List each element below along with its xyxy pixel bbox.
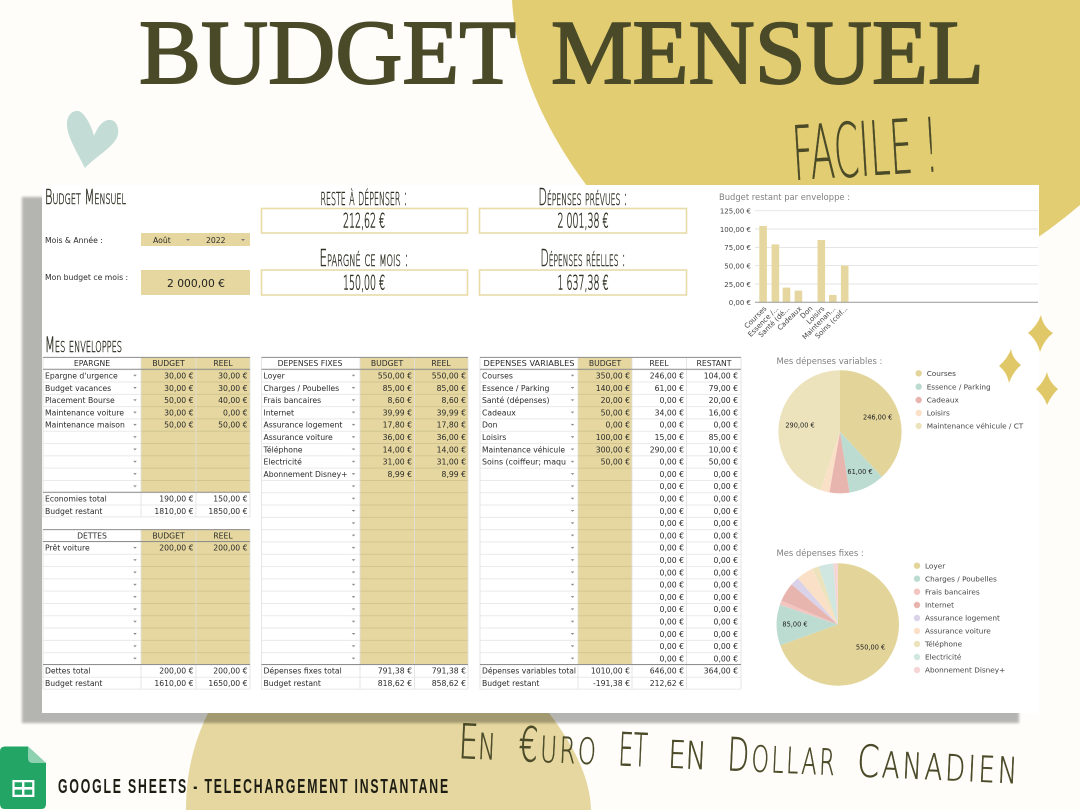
monthly budget [45, 270, 250, 295]
table: depenses variables: 0,00 € [660, 581, 684, 590]
table: epargne: Budget restant [45, 507, 102, 516]
table: depenses fixes: 8,99 € [388, 470, 412, 479]
table: depenses variables: 100,00 € [596, 433, 630, 442]
table: epargne: 40,00 € [218, 396, 248, 405]
legend: depenses variables: Essence / Parking [927, 382, 991, 391]
table: epargne: Placement Bourse [45, 396, 115, 405]
table: depenses variables: Dépenses variables total [482, 667, 576, 676]
table: depenses fixes: REEL [431, 359, 451, 368]
legend: depenses fixes: Abonnement Disney+ [925, 666, 1005, 675]
kpi: epargne ce mois [262, 246, 468, 295]
table: depenses variables: 0,00 € [660, 605, 684, 614]
bar chart: budget restant par enveloppe: Essence /... [747, 305, 780, 339]
table: depenses variables: 0,00 € [606, 421, 630, 430]
month and year selector: 2022 [206, 236, 226, 245]
legend: depenses fixes: Assurance logement [925, 614, 1000, 623]
table: epargne: BUDGET [152, 359, 185, 368]
table: depenses variables: 0,00 € [714, 593, 738, 602]
pie chart: depenses variables [776, 356, 902, 493]
kpi: reste a depenser: 212,62 € [343, 210, 385, 232]
footer text: en euro et en dollar canadien: EN [667, 733, 707, 778]
bar chart: budget restant par enveloppe: Maintenan... [801, 305, 837, 341]
kpi: epargne ce mois: Epargné ce mois : [320, 246, 408, 272]
table: epargne: 50,00 € [164, 396, 194, 405]
table: depenses fixes: 818,62 € [378, 679, 412, 688]
table: depenses variables: 85,00 € [709, 433, 738, 442]
table: depenses fixes: 791,38 € [432, 667, 466, 676]
table: depenses fixes: 550,00 € [378, 372, 412, 380]
table: depenses variables: Cadeaux [482, 408, 516, 417]
table: depenses variables: 0,00 € [714, 482, 738, 491]
footer text: en euro et en dollar canadien: CANADIEN [856, 736, 1021, 794]
kpi: depenses reelles: 1 637,38 € [558, 272, 608, 294]
bar chart: budget restant par enveloppe: 0,00 € [729, 299, 751, 307]
table: depenses variables: 0,00 € [660, 593, 684, 602]
table: depenses variables: 50,00 € [601, 408, 630, 417]
table: depenses variables: 0,00 € [714, 568, 738, 577]
section heading: mes enveloppes: Mes enveloppes [45, 333, 122, 357]
table: depenses variables: 50,00 € [601, 458, 630, 467]
table: depenses variables: 0,00 € [660, 470, 684, 479]
table: depenses variables: 646,00 € [650, 667, 684, 676]
table: depenses fixes: 8,60 € [442, 396, 466, 405]
table: depenses fixes: 14,00 € [437, 445, 466, 454]
footer text: en euro et en dollar canadien [457, 714, 1021, 795]
table: depenses variables: 0,00 € [660, 568, 684, 577]
legend: depenses fixes: Charges / Poubelles [925, 574, 997, 583]
table: depenses fixes: 17,80 € [383, 421, 412, 430]
table: depenses variables: 0,00 € [660, 630, 684, 639]
background blob: bottom [186, 690, 591, 810]
table: depenses variables: 0,00 € [714, 605, 738, 614]
legend: depenses fixes [914, 561, 1005, 675]
table: dettes: Dettes total [45, 667, 90, 676]
table: depenses variables: 0,00 € [714, 556, 738, 565]
table: depenses fixes: Téléphone [262, 445, 303, 454]
table: depenses fixes: 8,99 € [442, 470, 466, 479]
table: depenses fixes [262, 357, 468, 689]
bar chart: budget restant par enveloppe: 75,00 € [724, 244, 751, 252]
table: depenses variables: Santé (dépenses) [482, 396, 549, 405]
pie chart: depenses fixes: Mes dépenses fixes : [776, 548, 864, 558]
table: depenses variables: 0,00 € [714, 618, 738, 626]
pie chart: depenses fixes: 85,00 € [782, 620, 808, 628]
table: depenses variables: 0,00 € [660, 544, 684, 553]
legend: depenses fixes: Loyer [925, 561, 945, 570]
table: depenses variables: RESTANT [697, 359, 732, 368]
bar chart: budget restant par enveloppe: 50,00 € [724, 262, 751, 270]
table: depenses fixes: 858,62 € [432, 679, 466, 688]
table: epargne: 50,00 € [218, 421, 248, 430]
table: depenses variables: 0,00 € [714, 630, 738, 639]
table: dettes: 200,00 € [159, 544, 194, 553]
table: depenses variables [480, 357, 741, 689]
table: depenses variables: 0,00 € [714, 654, 738, 663]
table: depenses variables: 0,00 € [660, 458, 684, 467]
table: dettes: 200,00 € [213, 544, 248, 553]
kpi: reste a depenser: reste à dépenser : [320, 182, 408, 211]
bar chart: budget restant par enveloppe: Santé (dé... [757, 305, 791, 339]
table: depenses variables: 104,00 € [704, 372, 738, 380]
table: dettes: 1650,00 € [208, 679, 248, 688]
month and year selector: Août [153, 236, 171, 245]
table: depenses fixes: Assurance logement [264, 421, 342, 430]
legend: depenses variables: Courses [927, 369, 956, 378]
table: epargne: Budget vacances [45, 384, 111, 393]
table: depenses variables: 0,00 € [660, 556, 684, 565]
table: depenses variables: 0,00 € [660, 421, 684, 430]
table: depenses fixes: 8,60 € [388, 396, 412, 405]
table: depenses variables: 0,00 € [660, 654, 684, 663]
table: depenses variables: 290,00 € [650, 445, 684, 454]
table: depenses variables: 0,00 € [660, 618, 684, 626]
legend: depenses variables: Cadeaux [927, 396, 959, 405]
table: depenses variables: 246,00 € [650, 372, 684, 380]
table: depenses variables: REEL [649, 359, 669, 368]
month and year selector: Mois & Année : [45, 236, 103, 245]
table: depenses variables: 0,00 € [660, 519, 684, 528]
table: epargne: 50,00 € [164, 421, 194, 430]
bar chart: budget restant par enveloppe [719, 192, 1038, 341]
table: epargne: 150,00 € [213, 494, 248, 504]
table: dettes: DETTES [77, 531, 107, 540]
footer text: en euro et en dollar canadien: DOLLAR [726, 727, 839, 786]
table: depenses variables: 0,00 € [714, 421, 738, 430]
legend: depenses fixes: Frais bancaires [925, 587, 980, 596]
table: depenses variables: 15,00 € [655, 433, 684, 442]
table: depenses variables: 0,00 € [714, 519, 738, 528]
table: depenses variables: 0,00 € [660, 396, 684, 405]
table: epargne [43, 357, 250, 517]
table: depenses fixes: 550,00 € [432, 372, 466, 380]
month and year selector [45, 233, 250, 246]
legend: depenses variables: Maintenance véhicule / CT [927, 422, 1024, 431]
footer text: en euro et en dollar canadien: €URO [517, 717, 600, 776]
table: depenses fixes: Budget restant [264, 679, 321, 688]
legend: depenses variables: Loisirs [927, 409, 950, 418]
table: depenses fixes: BUDGET [371, 359, 403, 368]
kpi: depenses reelles: Dépenses réelles : [540, 246, 626, 272]
table: epargne: 30,00 € [164, 372, 194, 380]
table: depenses variables: 0,00 € [714, 642, 738, 651]
kpi: reste a depenser [262, 182, 468, 233]
table: depenses variables: 0,00 € [714, 507, 738, 516]
table: depenses variables: 140,00 € [596, 384, 630, 393]
monthly budget: Mon budget ce mois : [45, 273, 128, 282]
table: depenses variables: 212,62 € [650, 679, 684, 688]
table: epargne: Epargne d'urgence [45, 372, 118, 380]
kpi: depenses prevues: 2 001,38 € [558, 210, 608, 232]
table: epargne: 30,00 € [164, 408, 194, 417]
legend: depenses fixes: Electricité [925, 653, 962, 662]
table: dettes: 1610,00 € [154, 679, 194, 688]
pie chart: depenses variables: 61,00 € [847, 468, 873, 476]
table: depenses fixes: Abonnement Disney+ [264, 470, 348, 479]
table: depenses variables: 0,00 € [660, 507, 684, 516]
title [139, 2, 984, 103]
table: depenses fixes: 39,99 € [437, 408, 466, 417]
table: depenses fixes: 36,00 € [383, 433, 412, 442]
table: depenses variables: Maintenance véhicule [482, 445, 565, 454]
table: epargne: 30,00 € [164, 384, 194, 393]
table: depenses variables: 34,00 € [655, 408, 684, 417]
table: epargne: Maintenance voiture [45, 408, 124, 417]
table: depenses variables: Budget restant [482, 679, 539, 688]
table: epargne: 190,00 € [159, 494, 194, 504]
bar chart: budget restant par enveloppe: Soins (coif... [814, 305, 849, 340]
table: epargne: Economies total [45, 494, 107, 504]
footer text: en euro et en dollar canadien: ET [617, 722, 649, 778]
table: dettes: 200,00 € [213, 667, 248, 676]
table: depenses fixes: 85,00 € [383, 384, 412, 393]
pie chart: depenses variables: 290,00 € [785, 422, 815, 430]
table: epargne: 1810,00 € [154, 507, 194, 516]
table: depenses variables: 350,00 € [596, 372, 630, 380]
table: depenses fixes: 31,00 € [383, 458, 412, 467]
table: depenses variables: 0,00 € [714, 494, 738, 504]
table: depenses variables: 50,00 € [709, 458, 738, 467]
table: epargne: EPARGNE [74, 359, 110, 368]
pie chart: depenses fixes: 550,00 € [856, 644, 885, 652]
bar chart: budget restant par enveloppe: Cadeaux [776, 305, 803, 332]
table: dettes [43, 529, 250, 689]
table: depenses variables: 0,00 € [660, 482, 684, 491]
table: depenses variables: -191,38 € [593, 679, 630, 688]
bar chart: budget restant par enveloppe: Don [799, 305, 814, 320]
pie chart: depenses fixes [776, 548, 899, 686]
footer text: google sheets: GOOGLE SHEETS - TELECHARGEMENT INSTANTANE [58, 776, 450, 798]
icon: google sheets [0, 746, 46, 809]
table: depenses fixes: 791,38 € [378, 667, 412, 676]
bar chart: budget restant par enveloppe: 25,00 € [724, 281, 751, 289]
table: depenses variables: DEPENSES VARIABLES [484, 359, 575, 368]
bar chart: budget restant par enveloppe: Courses [743, 305, 769, 330]
table: dettes: REEL [213, 531, 233, 540]
table: epargne: 0,00 € [223, 408, 248, 417]
legend: depenses fixes: Internet [925, 601, 954, 610]
table: depenses variables: 0,00 € [714, 470, 738, 479]
sheet heading: Budget Mensuel [45, 185, 126, 209]
table: depenses fixes: 36,00 € [437, 433, 466, 442]
table: depenses variables: 1010,00 € [591, 667, 630, 676]
table: depenses fixes: 31,00 € [437, 458, 466, 467]
bar chart: budget restant par enveloppe: 100,00 € [720, 226, 751, 234]
table: depenses fixes: 39,99 € [383, 408, 412, 417]
pie chart: depenses variables: Mes dépenses variables : [776, 356, 882, 366]
table: depenses variables: 20,00 € [709, 396, 738, 405]
bar chart: budget restant par enveloppe: Budget restant par enveloppe : [719, 192, 850, 202]
table: depenses variables: 0,00 € [714, 581, 738, 590]
table: depenses fixes: 14,00 € [383, 445, 412, 454]
icon: heart [67, 111, 118, 168]
table: depenses variables: Don [482, 421, 498, 430]
title: MENSUEL [551, 2, 984, 103]
table: depenses fixes: 17,80 € [437, 421, 466, 430]
table: depenses fixes: Dépenses fixes total [264, 667, 342, 676]
monthly budget: 2 000,00 € [167, 277, 225, 290]
table: depenses fixes: Loyer [264, 372, 286, 380]
table: depenses variables: Loisirs [482, 433, 506, 442]
background blob: top right [512, 0, 1080, 300]
table: depenses fixes: Assurance voiture [264, 433, 333, 442]
table: epargne: Maintenance maison [45, 421, 125, 430]
kpi: depenses reelles [480, 246, 686, 295]
table: epargne: 30,00 € [218, 384, 248, 393]
bar chart: budget restant par enveloppe: Loisirs [805, 305, 827, 326]
kpi: depenses prevues [480, 185, 686, 233]
table: depenses variables: Courses [482, 372, 513, 380]
table: depenses fixes: Frais bancaires [264, 396, 321, 405]
bar chart: budget restant par enveloppe: 125,00 € [720, 208, 751, 216]
table: depenses variables: 0,00 € [714, 531, 738, 540]
legend: depenses fixes: Assurance voiture [925, 627, 991, 636]
table: depenses variables: 300,00 € [596, 445, 630, 454]
table: depenses variables: 16,00 € [709, 408, 738, 417]
table: epargne: 30,00 € [218, 372, 248, 380]
table: depenses variables: 0,00 € [660, 642, 684, 651]
table: depenses fixes: 85,00 € [437, 384, 466, 393]
table: depenses variables: 364,00 € [704, 667, 738, 676]
kpi: epargne ce mois: 150,00 € [343, 272, 385, 294]
table: depenses variables: BUDGET [589, 359, 621, 368]
table: depenses variables: 61,00 € [655, 384, 684, 393]
table: depenses fixes: DEPENSES FIXES [278, 359, 343, 368]
table: depenses variables: Soins (coiffeur; maqu [482, 458, 566, 467]
table: dettes: Prêt voiture [45, 544, 90, 553]
table: depenses fixes: Charges / Poubelles [264, 384, 339, 393]
table: depenses variables: 0,00 € [660, 494, 684, 504]
legend: depenses fixes: Téléphone [924, 640, 963, 649]
table: depenses variables: Essence / Parking [482, 384, 550, 393]
kpi: depenses prevues: Dépenses prévues : [538, 185, 628, 211]
title: BUDGET [139, 2, 516, 103]
table: depenses variables: 79,00 € [709, 384, 738, 393]
table: dettes: 200,00 € [159, 667, 194, 676]
table: depenses variables: 0,00 € [714, 544, 738, 553]
legend: depenses variables [916, 369, 1024, 431]
table: depenses variables: 0,00 € [660, 531, 684, 540]
table: depenses variables: 10,00 € [709, 445, 738, 454]
table: epargne: REEL [213, 359, 233, 368]
table: dettes: Budget restant [45, 679, 102, 688]
panel: spreadsheet [42, 185, 1039, 713]
table: dettes: BUDGET [152, 531, 185, 540]
pie chart: depenses variables: 246,00 € [863, 414, 892, 422]
panel shadow [22, 197, 1019, 723]
footer text: en euro et en dollar canadien: EN [457, 714, 497, 772]
table: depenses fixes: Electricité [264, 458, 302, 467]
table: depenses variables: 20,00 € [601, 396, 630, 405]
table: depenses fixes: Internet [264, 408, 294, 417]
icon: sparkles [999, 315, 1058, 405]
table: epargne: 1850,00 € [208, 507, 248, 516]
